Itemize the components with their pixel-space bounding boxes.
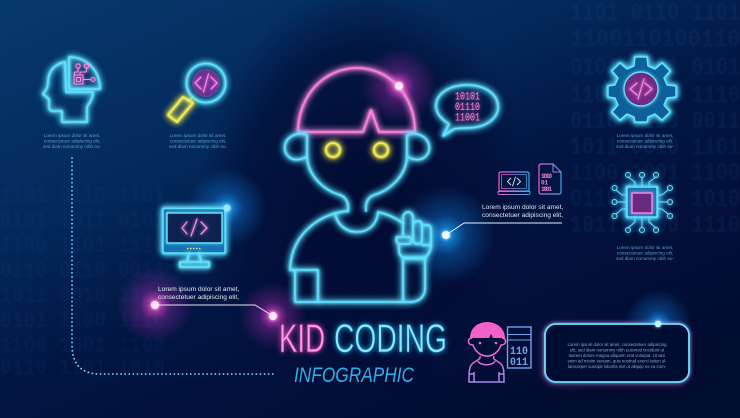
icon: binary calculator panel: 011 [510, 357, 528, 369]
icon: laptop [498, 172, 530, 194]
hand [396, 212, 431, 258]
caption: gear [616, 133, 674, 149]
icon: binary file: 1001 [541, 186, 552, 193]
box body text: elit, sed diam nonummy nibh euismod tincidunt ut [570, 348, 665, 352]
caption: magnifying glass: sed diam nonummy nibh eu- [169, 144, 227, 149]
caption: microchip: Lorem ipsum dolor sit amet, [617, 245, 673, 250]
box body text [567, 342, 667, 369]
caption: head icon [43, 133, 101, 149]
caption: microchip: sed diam nonummy nibh eu- [616, 256, 674, 261]
vertical and horizontal dotted connector [72, 158, 276, 374]
caption: magnifying glass: consectetuer adipiscing elit, [170, 138, 226, 144]
caption: magnifying glass [169, 133, 227, 149]
background: binary pattern left: 1100 1001 1100 [0, 333, 165, 359]
cap of the boy [298, 68, 415, 132]
title: kid coding [279, 317, 447, 361]
callout text left [158, 286, 240, 301]
callout text left: consectetuer adipiscing elit, [158, 294, 239, 301]
eyes [326, 143, 388, 157]
character: boy [285, 68, 431, 302]
title glow layer: KID [279, 317, 325, 361]
title glow layer: CODING [334, 317, 447, 361]
box body text: enim ad minim veniam, quis nostrud exerci tation ul- [567, 358, 667, 364]
icon: head with circuit brain [43, 57, 100, 122]
background: binary pattern left: 1100 1101 1110 [0, 233, 165, 259]
box body text: Lorem ipsum dolor sit amet, consectetuer adipiscing [567, 342, 667, 347]
callout text right: consectetuer adipiscing elit, [482, 212, 563, 219]
icon: binary file [539, 164, 561, 194]
icon: computer monitor [163, 204, 230, 267]
background: binary pattern left: 0101 1100 1110 [0, 308, 165, 334]
caption: head icon: consectetuer adipiscing elit, [44, 138, 100, 144]
title: kid coding: KID [279, 317, 325, 361]
callout text left: Lorem ipsum dolor sit amet, [158, 286, 240, 293]
caption: microchip [616, 245, 674, 261]
caption: magnifying glass: Lorem ipsum dolor sit amet, [170, 133, 226, 138]
background: binary pattern left: 1011 0010 1101 [0, 283, 165, 309]
icon: circuit in brain [74, 64, 95, 84]
icon: small kid [468, 322, 506, 382]
speech bubble with binary [436, 85, 498, 136]
caption: gear: consectetuer adipiscing elit, [617, 138, 673, 144]
background: binary pattern left [0, 183, 165, 381]
callout text right: Lorem ipsum dolor sit amet, [482, 204, 564, 211]
chip pins [612, 172, 672, 232]
panel: text box [543, 321, 689, 384]
caption: head icon: sed diam nonummy nibh eu- [43, 144, 101, 149]
callout line left [151, 301, 277, 320]
title glow layer [279, 317, 447, 361]
icon: microchip [610, 170, 674, 234]
background: binary pattern left: 1101 0110 1101 [0, 183, 165, 209]
background: binary pattern left: 0110 0110 0011 [0, 258, 165, 284]
caption: head icon: Lorem ipsum dolor sit amet, [44, 133, 100, 138]
bubble binary digits: 10101 [455, 92, 480, 104]
callout line right [442, 223, 562, 239]
box body text: lamcorper suscipit lobortis nisl ut aliquip ex ea com- [568, 364, 667, 369]
icon: binary file: 01 [541, 180, 548, 186]
icon: binary file: 1010 [541, 173, 552, 180]
background: binary pattern left: 0101 1011 0101 [0, 208, 165, 234]
background: binary pattern left: 0110 1101 1010 [0, 355, 165, 381]
caption: microchip: consectetuer adipiscing elit, [617, 250, 673, 256]
caption: gear: sed diam nonummy nibh eu- [616, 144, 674, 149]
glow spots [117, 48, 692, 358]
body and shirt [290, 211, 425, 302]
bubble binary digits [455, 92, 480, 124]
dark shade behind character [200, 0, 530, 415]
caption: gear: Lorem ipsum dolor sit amet, [617, 133, 673, 138]
background: binary pattern top right [570, 0, 740, 240]
subtitle: infographic: INFOGRAPHIC [294, 364, 415, 387]
callout text right [482, 204, 564, 219]
bubble binary digits: 11001 [455, 112, 480, 124]
head, ears and neck [285, 134, 429, 211]
icon: binary calculator panel: 110 [510, 346, 528, 358]
icon: magnifying glass [168, 64, 226, 122]
box body text: laoreet dolore magna aliquam erat volutpat. Ut wisi [569, 353, 665, 358]
icon: binary calculator panel [508, 327, 531, 369]
bubble binary digits: 01110 [455, 102, 480, 114]
icon: gear [608, 57, 676, 122]
title: kid coding: CODING [334, 317, 447, 361]
